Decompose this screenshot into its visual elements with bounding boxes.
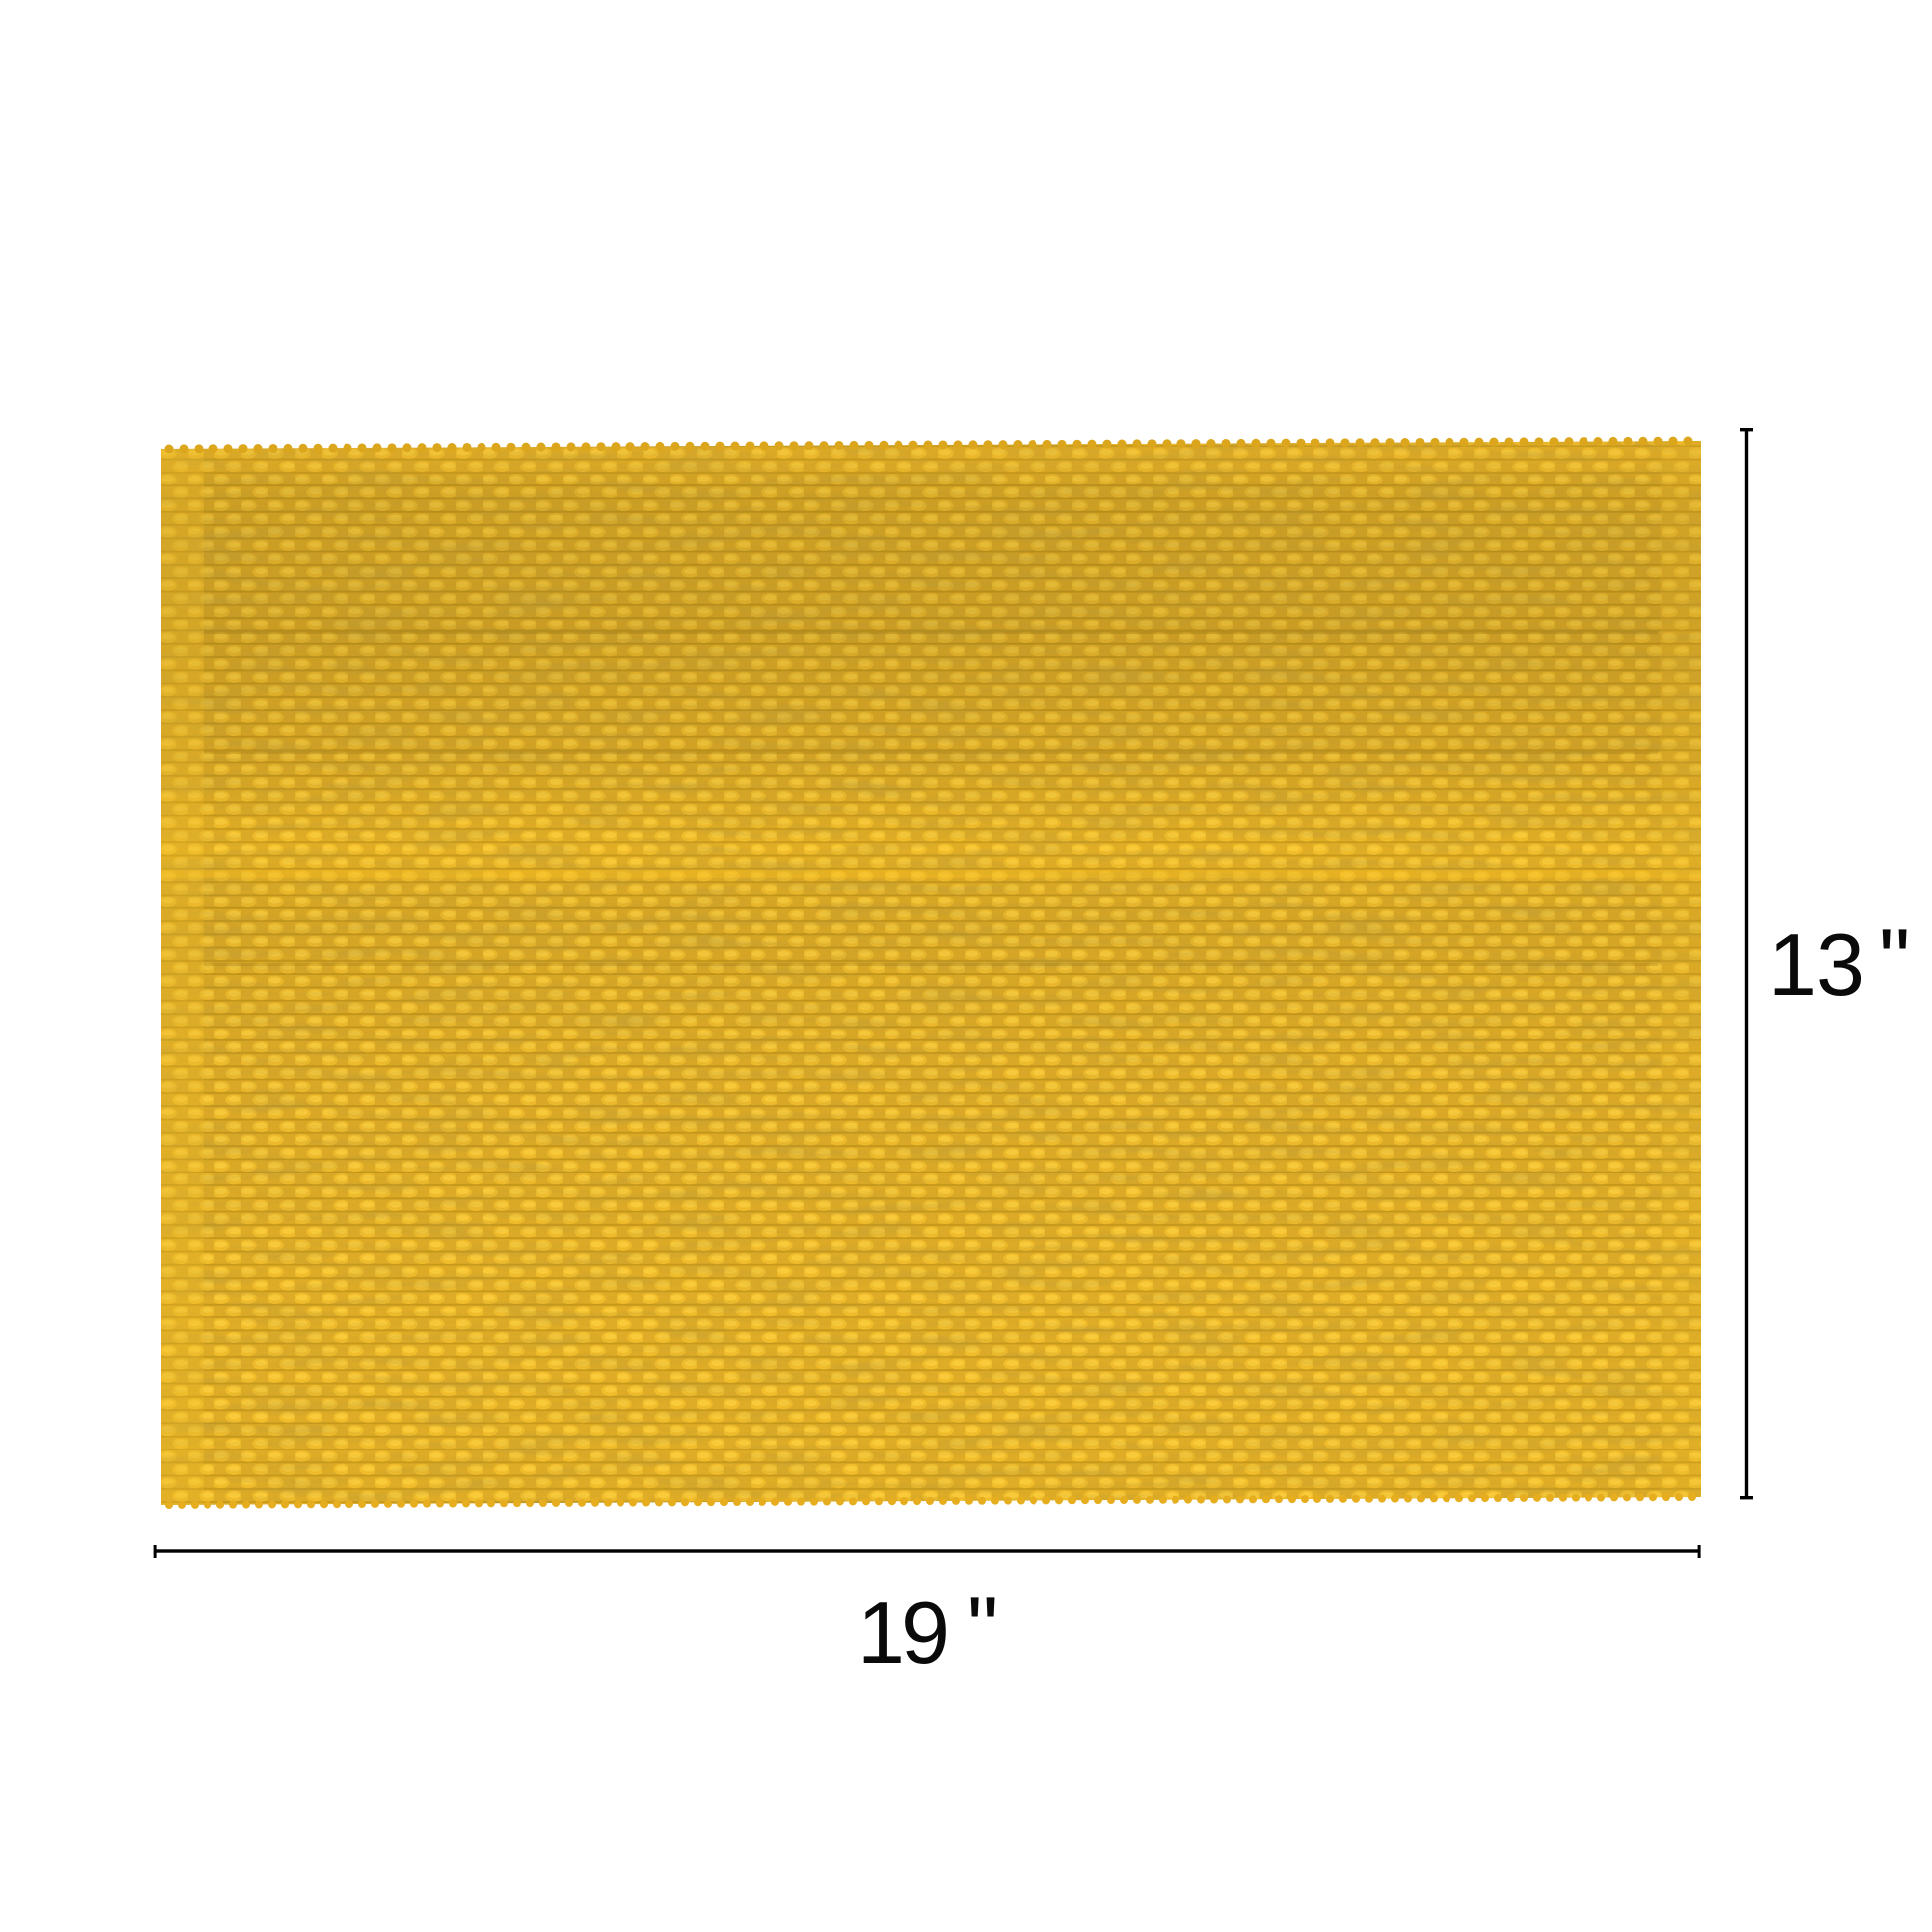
width label: 19 inches: 9 bbox=[901, 1584, 950, 1682]
scalloped bottom edge bbox=[169, 1497, 1694, 1505]
tonal banding and streaks bbox=[161, 437, 1701, 1509]
height label: 13 inches: " bbox=[1879, 910, 1910, 1009]
woven yellow placemat bbox=[161, 437, 1701, 1509]
width label: 19 inches: 1 bbox=[857, 1584, 905, 1682]
height label: 13 inches: 1 bbox=[1768, 915, 1817, 1014]
width label: 19 inches bbox=[857, 1579, 998, 1682]
height label: 13 inches: 3 bbox=[1816, 915, 1864, 1014]
height dimension line bbox=[1740, 428, 1753, 1499]
width dimension line bbox=[154, 1545, 1701, 1558]
placemat body with weave texture bbox=[161, 441, 1701, 1505]
height label: 13 inches bbox=[1768, 910, 1910, 1014]
infographic canvas bbox=[153, 428, 1906, 1664]
scalloped top edge bbox=[169, 441, 1694, 449]
width label: 19 inches: " bbox=[967, 1579, 998, 1677]
